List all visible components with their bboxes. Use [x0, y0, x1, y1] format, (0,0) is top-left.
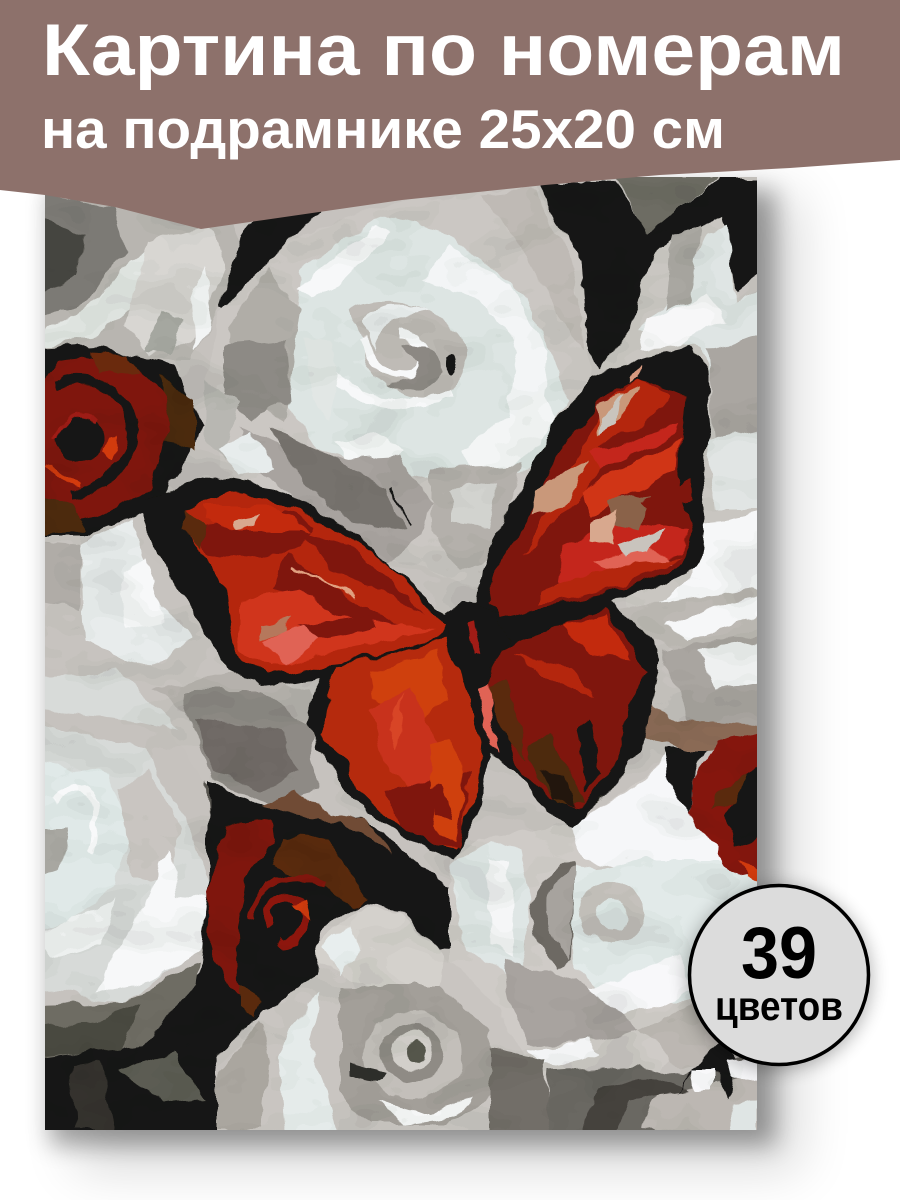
brown petal near bottom red rose	[260, 790, 390, 855]
rose: bottom right white	[450, 755, 775, 1100]
subtitle: на подрамнике 25х20 см	[41, 98, 725, 160]
dark gap: bottom left and centre	[30, 780, 450, 1140]
butterfly	[143, 347, 711, 860]
rose: red bottom	[208, 820, 368, 1018]
rose: red right edge	[664, 734, 757, 882]
title: Картина по номерам	[42, 10, 845, 91]
header banner	[0, 0, 900, 229]
butterfly: lower right wing	[486, 607, 650, 807]
rose: top left	[45, 195, 240, 360]
butterfly: black wing outline	[143, 347, 711, 860]
painted colour texture over roses	[45, 177, 757, 1130]
butterfly: upper right wing	[488, 378, 693, 617]
butterfly: upper left wing	[181, 492, 445, 675]
badge label: цветов	[715, 983, 843, 1029]
rose: large white centre	[205, 185, 590, 590]
rose: bottom right corner	[546, 1043, 757, 1130]
dark gaps between roses	[208, 177, 775, 370]
badge number: 39	[741, 913, 817, 994]
color count badge	[687, 886, 871, 1070]
butterfly: lower left wing	[318, 640, 481, 847]
rose: left lower	[45, 726, 212, 1003]
rose: left middle	[30, 520, 320, 810]
grey-green leaf in top right gap	[614, 175, 718, 232]
rose: bottom centre	[215, 905, 550, 1140]
butterfly: body	[445, 600, 510, 690]
rose: right upper	[600, 216, 757, 752]
rose: red top left	[30, 345, 204, 535]
grey-green petals bottom left	[45, 962, 202, 1058]
painting: butterfly and roses	[45, 177, 757, 1130]
canvas shadow	[50, 190, 800, 1170]
